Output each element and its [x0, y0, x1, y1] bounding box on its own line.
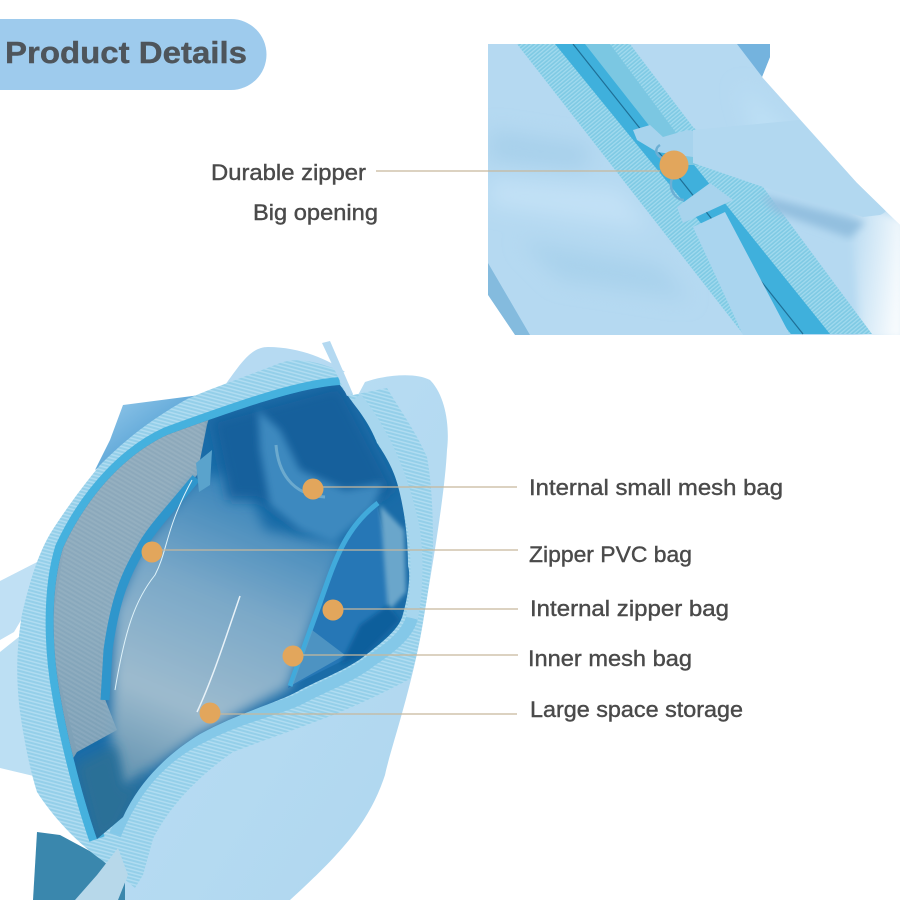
upper slider	[633, 125, 693, 157]
inner slider	[196, 450, 212, 492]
callout: inner mesh bag	[282, 646, 692, 671]
zipper teeth	[555, 44, 830, 334]
dark fold	[488, 263, 530, 335]
zipper tape ring	[17, 360, 433, 888]
pocket trim	[276, 445, 325, 497]
bottom zipper slider	[75, 848, 128, 900]
title banner	[0, 19, 266, 90]
callout: internal zipper bag: Internal zipper bag	[530, 596, 729, 621]
right mesh	[380, 505, 406, 612]
bottom strap	[33, 832, 130, 900]
top zipper pull	[322, 341, 353, 396]
PVC zipper	[105, 478, 196, 700]
bag body	[488, 44, 900, 335]
mesh texture	[50, 421, 207, 752]
back strap	[95, 395, 200, 470]
heading: Product Details: Product Details	[5, 35, 247, 70]
right pocket zipper	[290, 503, 378, 686]
callout: large space storage	[200, 697, 743, 724]
pull flap	[693, 120, 889, 217]
callout: internal zipper bag	[322, 596, 729, 621]
soft shading	[494, 136, 666, 290]
lower slider	[677, 183, 733, 223]
left lobe lower	[0, 636, 42, 778]
marker: durable zipper	[660, 150, 688, 180]
photo: zipper close-up	[488, 44, 900, 340]
right pocket lower mesh	[292, 630, 345, 685]
top lobe	[225, 347, 345, 385]
back tab	[728, 44, 770, 77]
back tab edge	[737, 44, 772, 78]
plastic glint	[197, 596, 240, 712]
upper right tape fold	[585, 44, 700, 165]
teeth slit	[573, 44, 803, 334]
right pocket	[288, 505, 390, 688]
fabric tape	[517, 44, 872, 334]
flap shadow	[760, 195, 865, 238]
PVC zipper edge	[115, 480, 192, 690]
callout: zipper PVC bag: Zipper PVC bag	[529, 542, 692, 567]
clear PVC storage	[110, 470, 345, 790]
top dark back wall	[204, 385, 388, 508]
lower strap	[693, 212, 790, 335]
bottom shadow	[76, 742, 143, 839]
bag body	[125, 375, 448, 900]
zipper ring	[656, 145, 684, 200]
text: Durable zipper: Durable zipper	[211, 160, 366, 185]
right zipper flap	[356, 398, 416, 618]
left lobe upper	[0, 559, 43, 640]
callout: inner mesh bag: Inner mesh bag	[528, 646, 692, 671]
front zipper flap	[115, 618, 412, 835]
right pocket dark corner	[340, 605, 400, 665]
small mesh pocket	[258, 410, 383, 543]
photo: open bag	[0, 341, 448, 900]
callout line: durable zipper	[376, 170, 660, 172]
callout: internal small mesh bag: Internal small mesh bag	[529, 475, 783, 500]
callout: zipper PVC bag	[142, 542, 692, 567]
right fade	[854, 212, 900, 335]
callout: large space storage: Large space storage	[530, 697, 743, 722]
interior	[54, 385, 410, 839]
left mesh pocket	[54, 420, 208, 758]
text: Big opening: Big opening	[253, 200, 378, 225]
left zipper teeth	[54, 385, 340, 839]
callout: internal small mesh bag	[302, 475, 783, 500]
